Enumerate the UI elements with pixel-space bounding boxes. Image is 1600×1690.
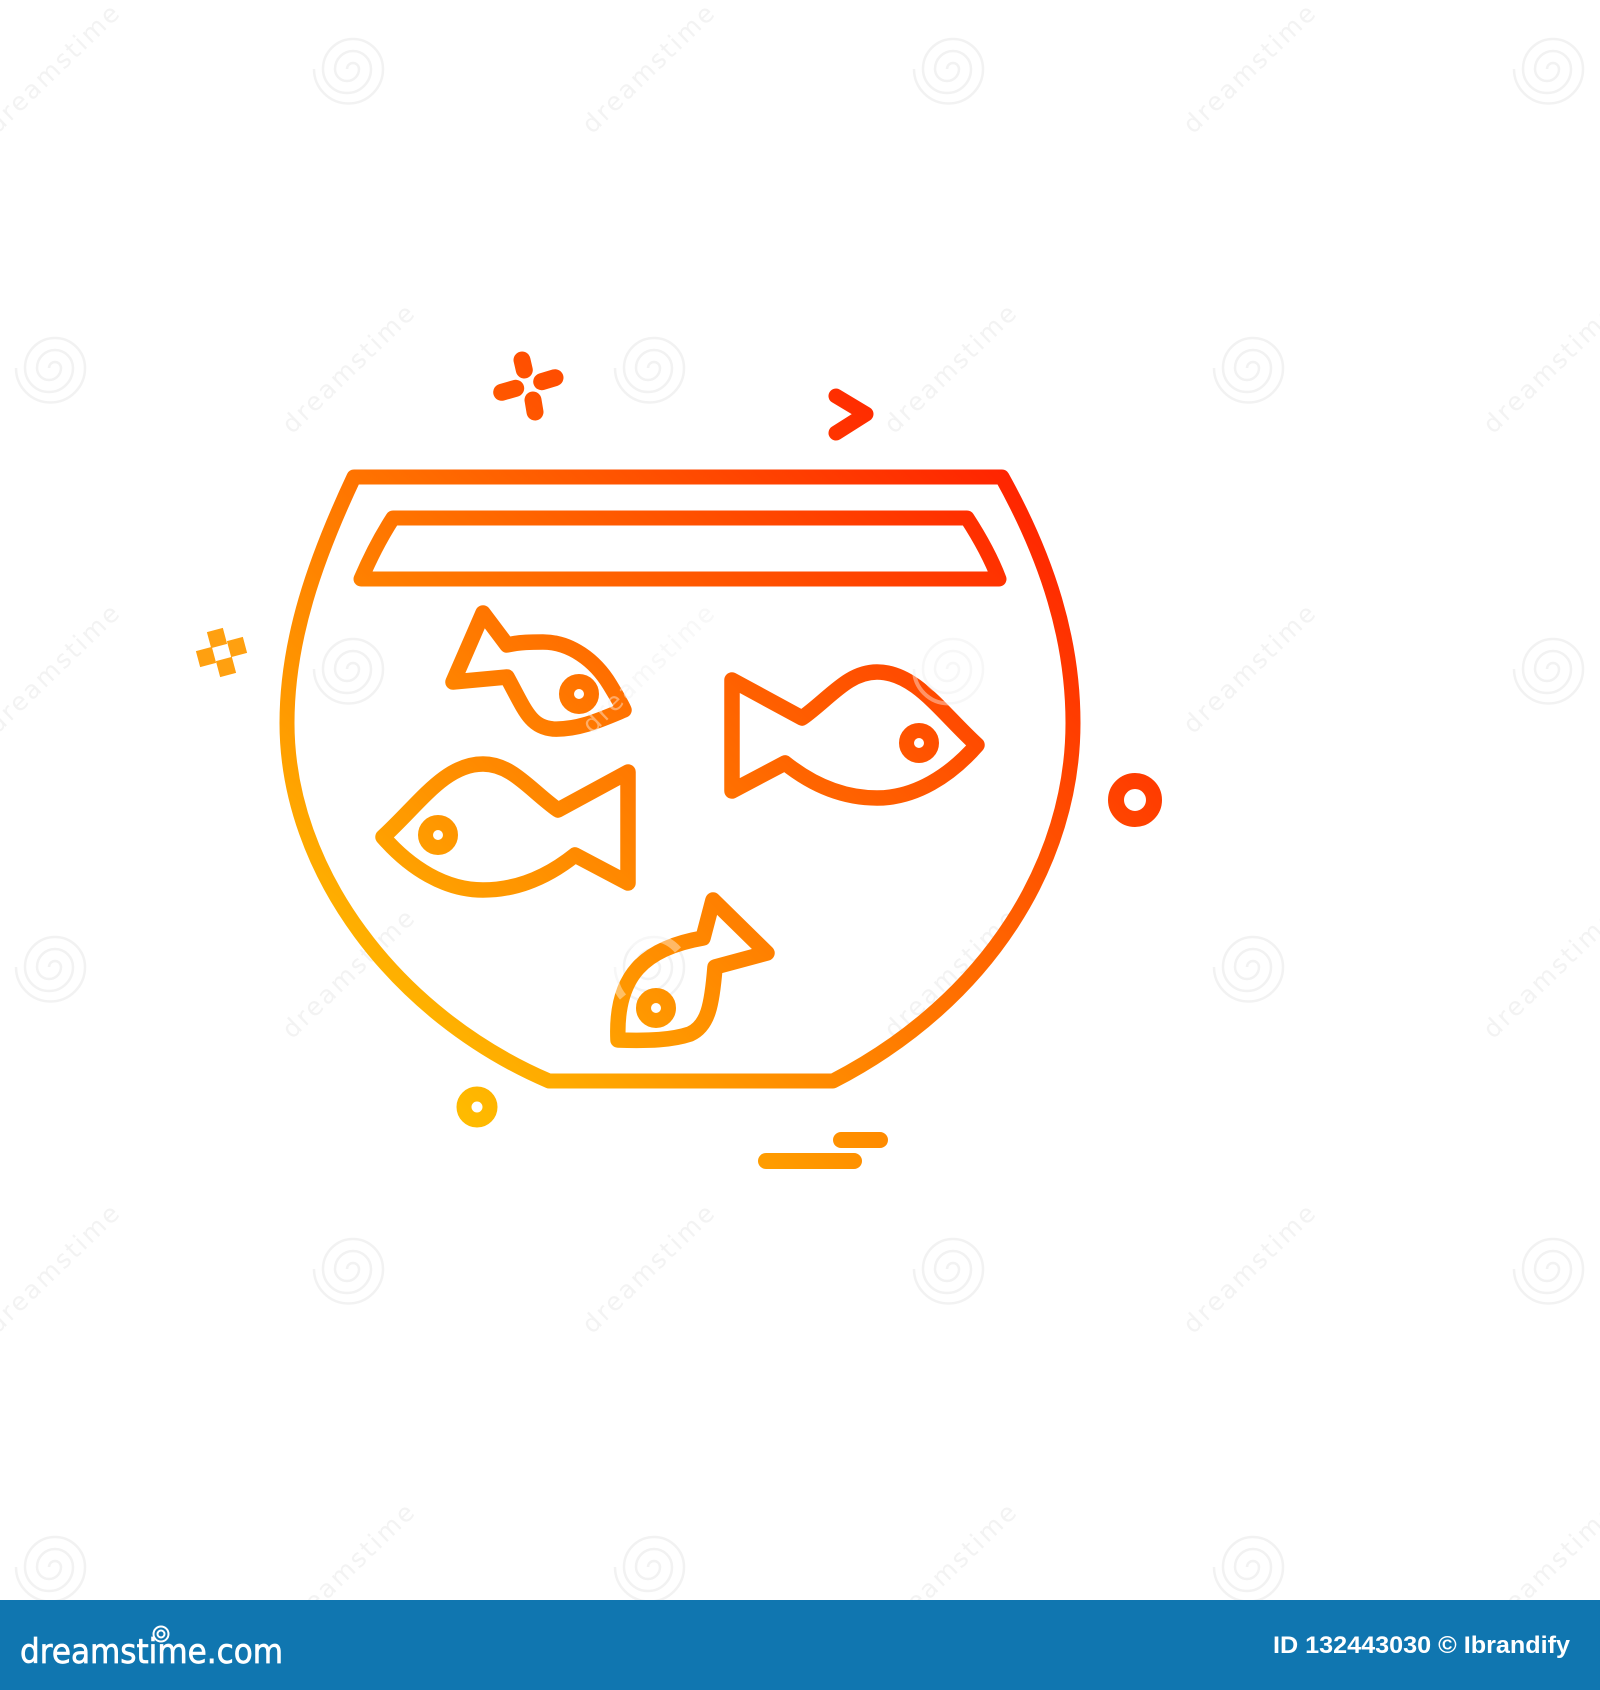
background watermark pattern: dreamstime — [276, 1498, 420, 1638]
icon: chevron — [836, 396, 866, 433]
logo text: dreamstime.com — [20, 1632, 283, 1672]
background watermark pattern: dreamstime — [878, 299, 1022, 439]
icon: small fish bottom — [618, 900, 767, 1040]
watermark overlay on fish: dreamstime — [576, 599, 720, 739]
icon: yellow dot — [464, 1094, 490, 1120]
background watermark pattern: dreamstime — [276, 904, 420, 1044]
background watermark pattern: dreamstime — [576, 599, 720, 739]
icon: small fish top left — [453, 613, 624, 729]
icon: fish bowl outline — [287, 477, 1073, 1081]
background watermark pattern: dreamstime — [1177, 599, 1321, 739]
background watermark pattern: dreamstime — [276, 299, 420, 439]
logo spiral — [154, 1626, 168, 1642]
footer bar — [0, 1600, 1600, 1690]
background watermark pattern: dreamstime — [1177, 0, 1321, 139]
background watermark pattern: dreamstime — [576, 0, 720, 139]
background watermark pattern: dreamstime — [576, 1199, 720, 1339]
icon: large fish left — [383, 764, 628, 890]
icon: motion dashes — [758, 1132, 888, 1169]
background watermark pattern: dreamstime — [1177, 1199, 1321, 1339]
image credit: ID 132443030 © Ibrandify — [1273, 1632, 1571, 1659]
background watermark pattern: dreamstime — [878, 1498, 1022, 1638]
icon: four-petal sparkle — [502, 360, 555, 412]
background watermark pattern: dreamstime — [878, 904, 1022, 1044]
icon: bowl water band — [361, 518, 999, 579]
icon: checker diamond — [196, 628, 247, 677]
watermark overlay on fish — [576, 599, 983, 997]
icon: large fish right — [732, 672, 977, 798]
icon: ring right — [1116, 781, 1154, 819]
